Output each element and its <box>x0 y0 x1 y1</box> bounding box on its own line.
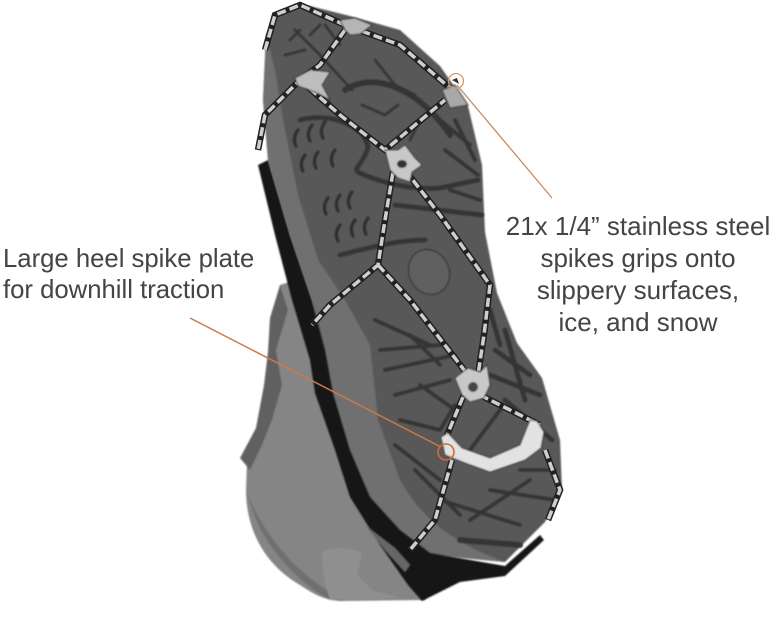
sole: rim <box>263 35 505 562</box>
sole: logo circle <box>401 243 457 301</box>
orange leader line: toe spike <box>448 74 552 198</box>
sole: tread channels <box>285 25 555 545</box>
label: heel spike plate <box>3 245 254 304</box>
label: heel spike plate: for downhill traction <box>3 276 224 304</box>
label: stainless steel spikes: spikes grips onto <box>540 243 736 273</box>
label: stainless steel spikes <box>506 211 770 337</box>
label: stainless steel spikes: slippery surfaces, <box>537 275 739 305</box>
label: heel spike plate: Large heel spike plate <box>3 245 254 273</box>
heel plate <box>441 420 544 472</box>
label: stainless steel spikes: ice, and snow <box>558 307 717 337</box>
spike plates <box>295 18 544 472</box>
sole <box>263 6 562 562</box>
label: stainless steel spikes: 21x 1/4” stainless steel <box>506 211 770 241</box>
chains <box>258 5 560 550</box>
boot upper <box>240 280 440 601</box>
strap <box>258 160 544 601</box>
orange leader line: heel plate <box>190 318 454 460</box>
sole: lugs <box>294 122 368 241</box>
